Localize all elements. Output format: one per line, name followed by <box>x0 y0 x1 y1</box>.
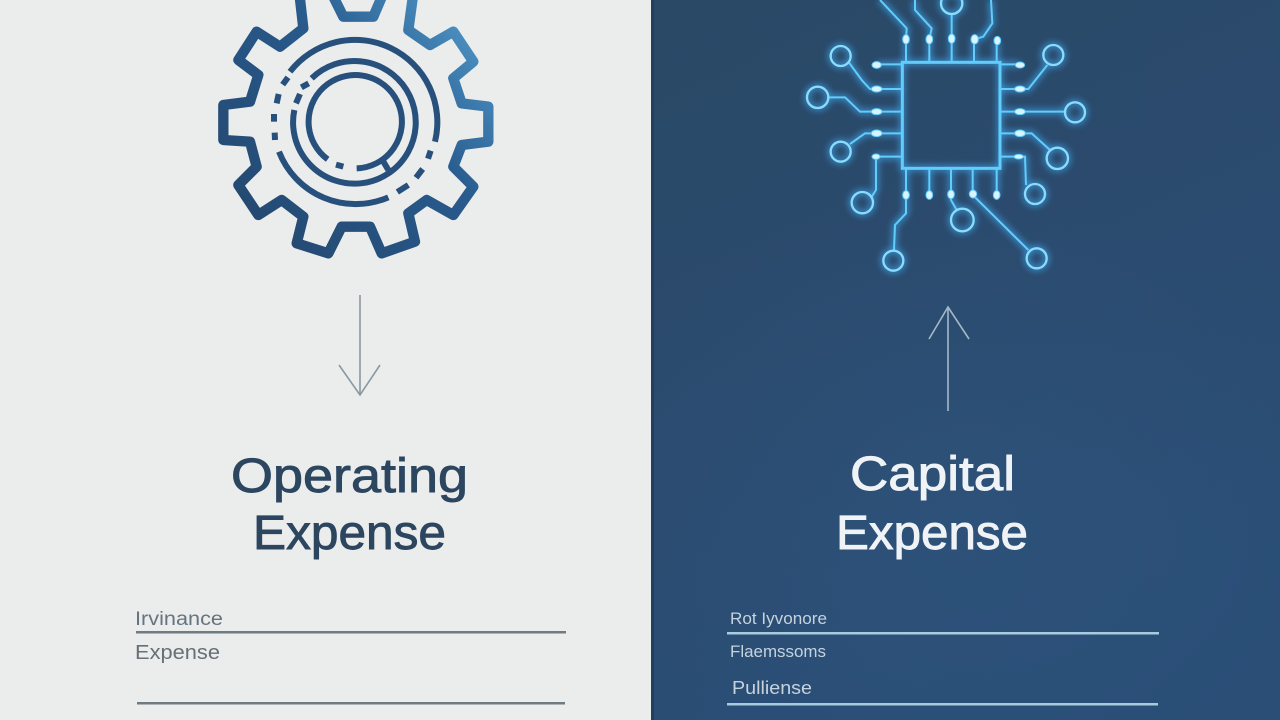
list: operating items <box>135 609 566 704</box>
arrow: up <box>929 307 969 411</box>
icon: gear <box>223 0 488 253</box>
list: operating items: Expense <box>135 642 220 664</box>
pin dots <box>871 34 1025 199</box>
heading: operating expense: Operating <box>231 450 468 503</box>
heading: operating expense: Expense <box>253 507 446 560</box>
heading: capital expense: Capital <box>850 448 1015 501</box>
list: capital items: Flaemssoms <box>730 642 826 661</box>
glow layer <box>807 0 1085 271</box>
panel: operating expense <box>0 0 651 720</box>
chip body and traces <box>807 0 1085 271</box>
arrow: down <box>339 295 380 395</box>
list: capital items <box>727 609 1159 706</box>
heading: capital expense <box>836 448 1028 560</box>
list: capital items: Pulliense <box>732 678 812 698</box>
heading: operating expense <box>231 450 468 560</box>
icon: circuit chip <box>807 0 1085 271</box>
panel: capital expense <box>651 0 1280 720</box>
heading: capital expense: Expense <box>836 507 1028 560</box>
list: operating items: Irvinance <box>135 609 223 630</box>
list: capital items: Rot Iyvonore <box>730 609 827 628</box>
